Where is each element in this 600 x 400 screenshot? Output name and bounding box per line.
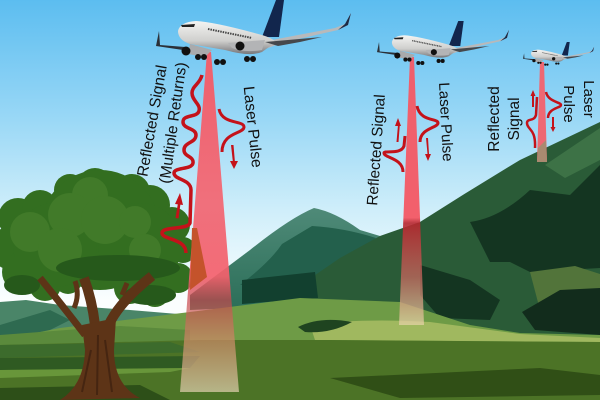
reflected signal waveform 1 [162,75,202,253]
tree crown shadows [4,255,180,305]
label: Laser Pulse 2: Laser Pulse [435,82,456,162]
label: Reflected Signal (Multiple Returns): Reflected Signal [134,64,171,178]
laser pulse arrow 1 [230,145,238,169]
large green hillside [242,122,600,340]
label: Reflected Signal 2: Reflected Signal [364,94,389,206]
laser beam 3 [537,62,547,162]
label: Reflected Signal 3: Reflected [486,86,503,152]
plane 2 [377,21,509,65]
tree trunk and branches [40,276,152,400]
distant mountain [190,208,440,310]
label: Reflected Signal 3 [486,86,523,152]
label: Laser Pulse 3: Laser [580,80,597,118]
laser pulse waveform 2 [417,106,438,142]
laser pulse waveform 1 [219,109,244,152]
tree crown highlights [10,177,161,272]
laser beam 2 [399,57,424,325]
label: Reflected Signal (Multiple Returns) [134,61,191,185]
label: Reflected Signal (Multiple Returns): (Multiple Returns) [157,61,191,185]
reflected signal waveform 3 [527,97,537,148]
tree crown [0,168,196,307]
tree [0,168,196,400]
beam 3 on ground [537,140,547,162]
beam 1 overlay on tree edge [190,228,207,290]
meadow [0,298,600,400]
laser pulse arrow 3 [550,117,556,132]
plane 1 [156,0,351,65]
label: Laser Pulse 3 [560,80,597,123]
laser pulse waveform 3 [546,92,561,118]
reflected arrow 1 [175,193,183,218]
laser pulse arrow 2 [425,138,431,161]
label: Laser Pulse 1: Laser Pulse [240,85,265,169]
hills behind the tree [0,300,190,345]
plane 3 [523,42,594,66]
label: Laser Pulse 3: Pulse [560,85,577,123]
label: Reflected Signal 3: Signal [506,97,523,141]
reflected arrow 2 [395,118,401,142]
reflected signal waveform 2 [384,136,405,172]
laser beam 1 [180,52,239,392]
reflected arrow 3 [530,90,536,107]
